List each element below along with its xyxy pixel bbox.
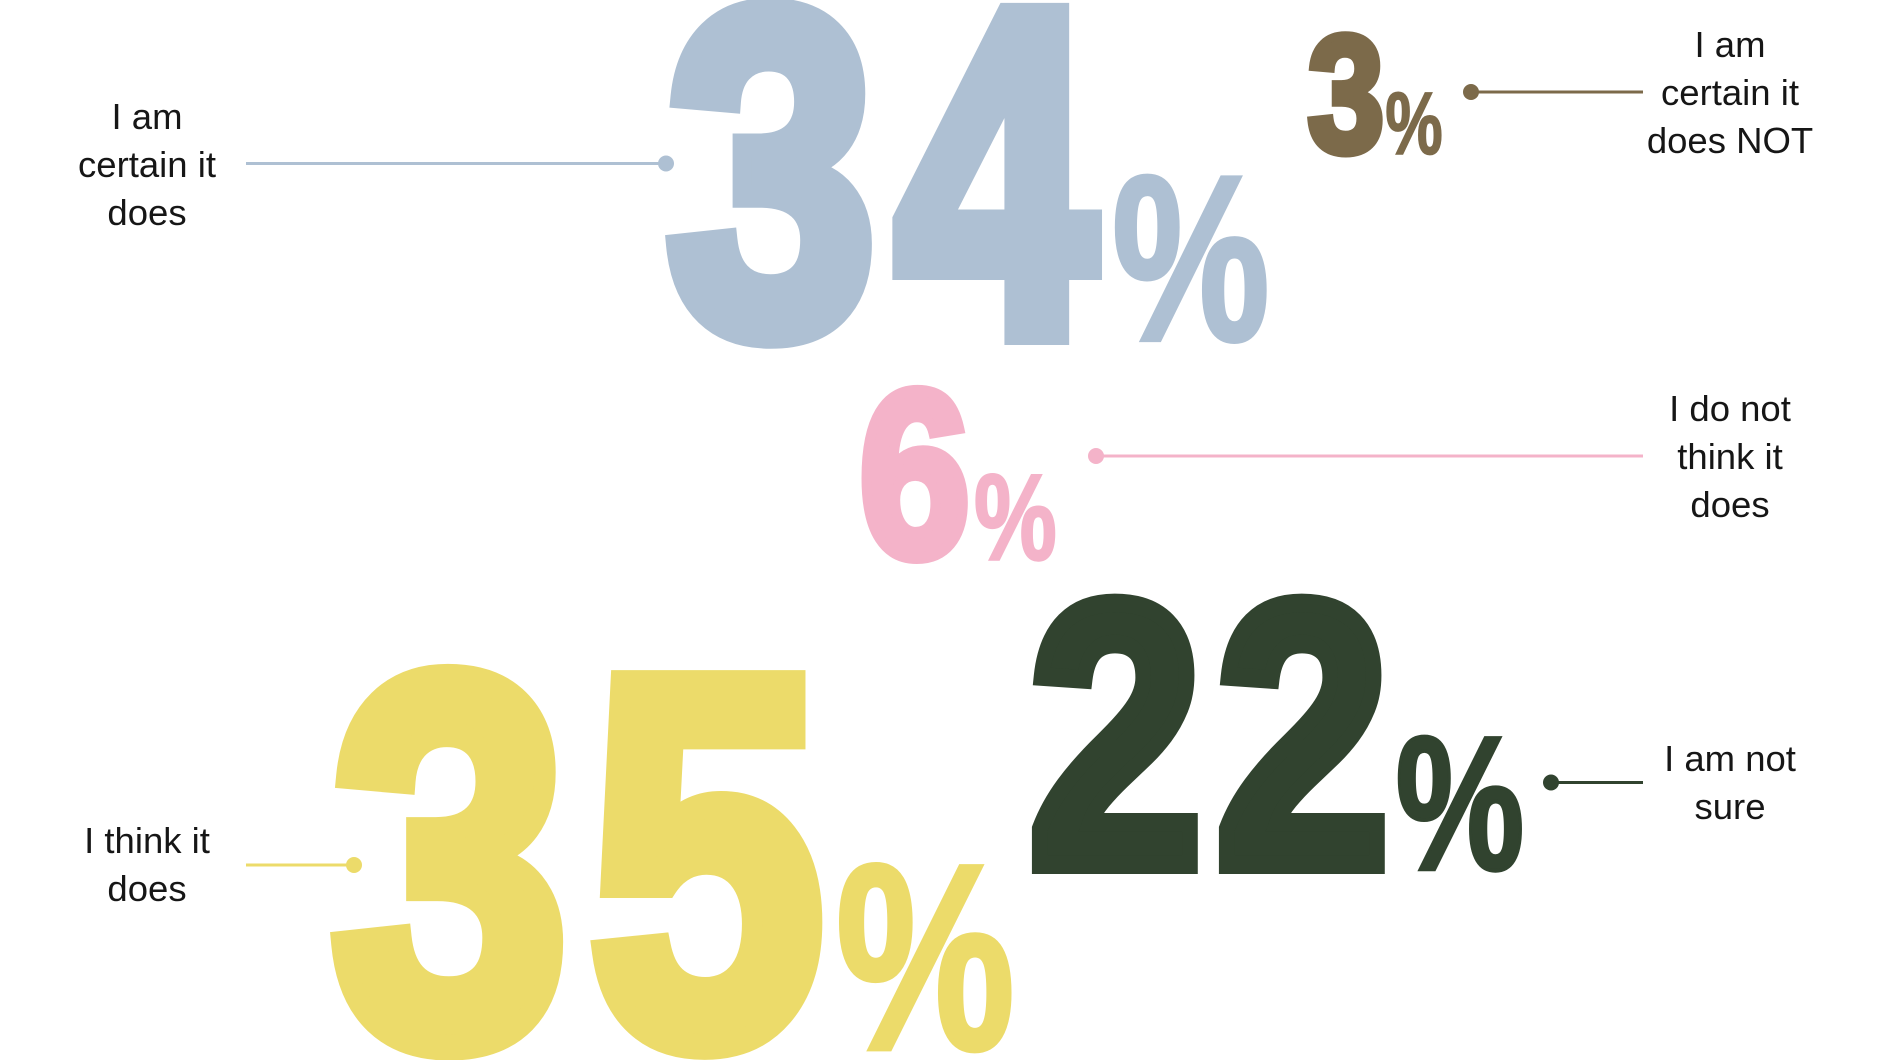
label: I am certain it does NOT: does NOT	[1647, 120, 1813, 161]
label: I am certain it does NOT	[1647, 24, 1813, 161]
number: 22%: 2	[1029, 527, 1202, 945]
number: 22%: 2	[1216, 527, 1389, 945]
number: 22%: %	[1396, 697, 1524, 910]
label: I am certain it does: I am	[112, 96, 182, 137]
connector: 35%	[246, 857, 362, 873]
label: I am certain it does NOT: I am	[1694, 24, 1766, 65]
connector: 6%	[1088, 448, 1643, 464]
label: I am certain it does: does	[107, 192, 187, 233]
stat: 6% I do not think it does	[859, 343, 1791, 607]
number: 6%: 6	[859, 343, 970, 607]
number: 3%	[1308, 2, 1443, 187]
stat: 34% I am certain it does	[78, 0, 1270, 432]
label: I am not sure: I am not	[1664, 738, 1796, 779]
label: I am certain it does NOT: certain it	[1661, 72, 1799, 113]
number: 3%: 3	[1308, 2, 1384, 187]
label: I do not think it does: think it	[1677, 436, 1783, 477]
label: I am not sure	[1664, 738, 1796, 827]
label: I do not think it does: I do not	[1669, 388, 1791, 429]
label: I think it does: does	[107, 868, 187, 909]
label: I am certain it does: certain it	[78, 144, 216, 185]
connector: 34%	[246, 156, 674, 172]
label: I think it does: I think it	[84, 820, 210, 861]
stat: 35% I think it does	[84, 568, 1015, 1060]
number: 34%: %	[1112, 127, 1270, 391]
number: 3%: %	[1385, 75, 1443, 173]
number: 34%	[667, 0, 1270, 432]
label: I am not sure: sure	[1694, 786, 1766, 827]
label: I do not think it does	[1669, 388, 1791, 525]
label: I do not think it does: does	[1690, 484, 1770, 525]
stat: 3% I am certain it does NOT	[1308, 2, 1813, 187]
label: I am certain it does	[78, 96, 216, 233]
number: 35%	[332, 568, 1015, 1060]
number: 6%	[859, 343, 1057, 607]
connector: 22%	[1543, 774, 1643, 790]
number: 22%	[1029, 527, 1524, 945]
connector: 3%	[1463, 84, 1643, 100]
label: I think it does	[84, 820, 210, 909]
number: 6%: %	[974, 451, 1057, 587]
stat: 22% I am not sure	[1029, 527, 1796, 945]
